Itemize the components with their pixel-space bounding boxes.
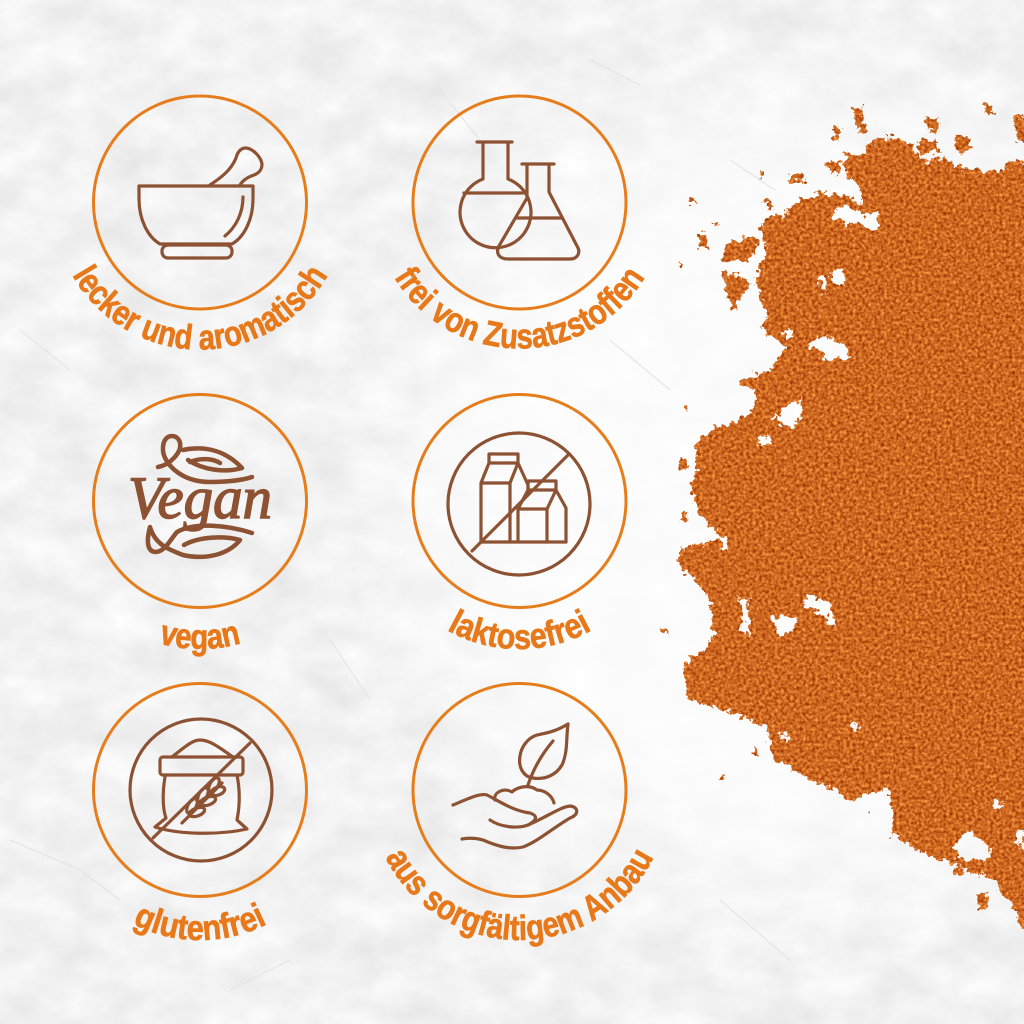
icon: milk cartons crossed out [448, 433, 590, 575]
badge ring [94, 684, 306, 896]
panel: aus sorgfältigem Anbau [386, 682, 654, 947]
panel: laktosefrei [412, 393, 628, 650]
panel: frei von Zusatzstoffen [394, 94, 645, 349]
icon: lab flasks [460, 142, 579, 259]
badge ring [413, 394, 626, 608]
icon: hand holding seedling [453, 724, 577, 848]
label: aus sorgfältigem Anbau [386, 849, 654, 947]
panel: vegan [92, 393, 308, 657]
icon: vegan script logo [128, 436, 272, 557]
label: glutenfrei [132, 902, 266, 941]
icon: flour sack crossed out [130, 719, 272, 861]
panel: glutenfrei [92, 682, 308, 941]
panel: lecker und aromatisch [72, 94, 328, 350]
label: laktosefrei [448, 608, 591, 650]
badge ring [94, 96, 306, 309]
icon: vegan script logo: Vegan [128, 465, 272, 531]
label: vegan [162, 624, 240, 657]
badge ring [413, 684, 626, 896]
badge ring [94, 394, 306, 608]
label: lecker und aromatisch [72, 263, 328, 350]
badge ring [413, 96, 626, 309]
powder: ground spice heap [660, 104, 1024, 940]
label: frei von Zusatzstoffen [394, 266, 645, 349]
icon: mortar and pestle [139, 148, 262, 258]
